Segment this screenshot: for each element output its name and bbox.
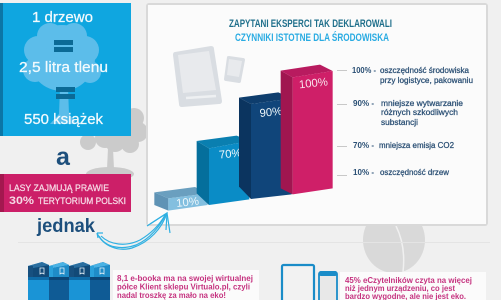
- panel: ebook fact: 8,1 e-booka ma na swojej wirtualnej: [117, 273, 253, 283]
- heading: survey title: ZAPYTANI EKSPERCI TAK DEKLAROWALI: [229, 18, 392, 30]
- panel: ebook fact: półce Klient sklepu Virtualo.pl, czyli: [117, 282, 250, 292]
- panel: multi-device fact: niż jednym urządzeniu, co jest: [345, 283, 455, 293]
- panel: ebook fact: nadal troszkę za mało na eko!: [117, 290, 226, 300]
- book stack four: [90, 262, 110, 300]
- legend item: 100%: przy logistyce, pakowaniu: [380, 76, 473, 85]
- panel: multi-device fact: 45% eCzytelników czyta na więcej: [345, 275, 472, 285]
- panel: tree equation: [0, 3, 131, 136]
- bar: 100%: 100%: [298, 76, 328, 91]
- panel: multi-device fact: [340, 272, 486, 300]
- bar: 70%: 70%: [218, 147, 242, 162]
- heading: survey title: CZYNNIKI ISTOTNE DLA ŚRODOWISKA: [235, 31, 389, 44]
- book stack one: [28, 262, 49, 300]
- text: connector a: a: [56, 143, 71, 171]
- text: forests line two: TERYTORIUM POLSKI: [38, 196, 126, 207]
- legend item: 90%: mniejsze wytwarzanie: [381, 99, 464, 108]
- book stack two: [49, 262, 69, 300]
- icon: grey background tree: [80, 108, 148, 181]
- text: 1 drzewo: 1 drzewo: [32, 9, 93, 26]
- icon: light tree silhouette: [23, 23, 101, 124]
- legend item: 100%: [352, 66, 473, 85]
- panel: expert survey card: [146, 3, 488, 226]
- bar: 100%: [281, 65, 333, 194]
- bar chart: [154, 65, 333, 211]
- bar: 10%: 10%: [176, 196, 200, 210]
- icon: ghost phone: [224, 56, 245, 83]
- legend item: 90%: różnych szkodliwych: [381, 108, 458, 117]
- legend item: 90%: 90% -: [353, 99, 374, 108]
- legend item: 10%: 10% -: [353, 168, 374, 177]
- legend item: 100%: oszczędność środowiska: [380, 66, 470, 75]
- heading: survey title: [229, 18, 392, 44]
- legend item: 70%: mniejsza emisja CO2: [379, 141, 455, 150]
- icon: grey coffee bean: [363, 207, 425, 273]
- legend item: 100%: 100% -: [352, 66, 376, 75]
- panel: ebook fact: [113, 270, 259, 300]
- text: 2,5 litra tlenu: 2,5 litra tlenu: [19, 59, 108, 76]
- bar: 90%: [239, 92, 292, 199]
- icon: ebook shelf: [28, 262, 110, 300]
- arrow: jednak to chart: [97, 213, 170, 249]
- text: forests line one: LASY ZAJMUJĄ PRAWIE: [9, 183, 109, 194]
- icon: equals sign two: [56, 87, 75, 99]
- panel: forests callout: [0, 174, 131, 212]
- legend item: 10%: oszczędność drzew: [380, 168, 449, 177]
- text: jednak: jednak: [36, 216, 95, 237]
- legend item: 90%: [353, 99, 464, 127]
- bar: 70%: [197, 136, 249, 205]
- icon: equals sign one: [54, 40, 73, 52]
- legend item: 70%: 70% -: [353, 141, 374, 150]
- bar: 10%: [154, 187, 208, 211]
- text: 550 książek: 550 książek: [24, 111, 103, 128]
- bar: 90%: 90%: [259, 106, 283, 120]
- icon: tablet and phone: [282, 265, 337, 300]
- book stack three: [69, 262, 90, 300]
- icon: ghost tablet: [173, 46, 222, 107]
- legend item: 90%: substancji: [381, 118, 418, 127]
- legend: [337, 66, 473, 177]
- text: forests line two percent: 30%: [9, 195, 34, 207]
